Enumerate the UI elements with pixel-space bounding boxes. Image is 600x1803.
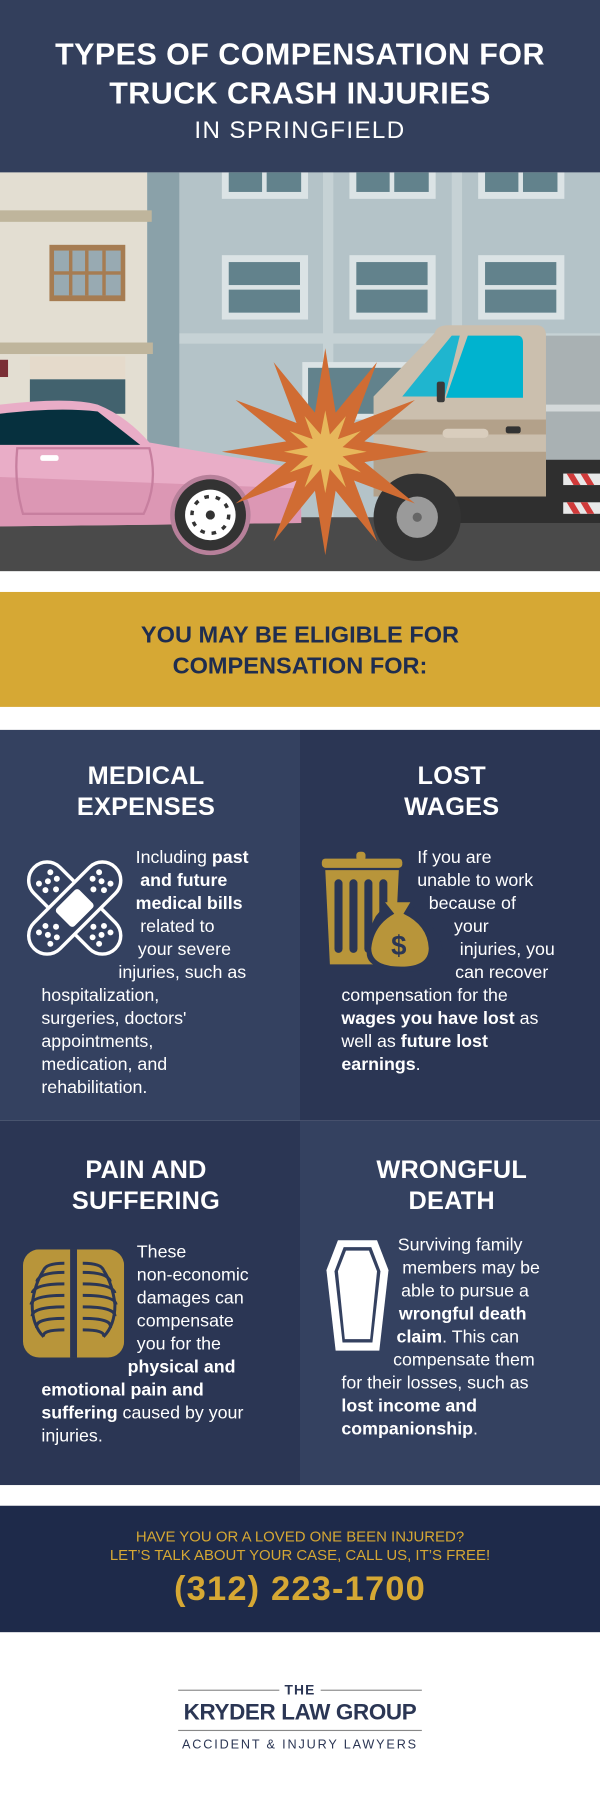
text: pain and suffering: injuries. (41, 1426, 103, 1446)
title: TRUCK CRASH INJURIES (109, 76, 491, 110)
text: medical expenses (41, 848, 249, 1098)
text: medical expenses: your severe (138, 940, 231, 960)
banner heading: COMPENSATION FOR: (173, 653, 427, 679)
icon: coffin (326, 1240, 389, 1351)
text: wrongful death: claim. This can (397, 1328, 519, 1347)
text: lost wages: wages you have lost as (341, 1009, 538, 1029)
text: wrongful death: for their losses, such as (341, 1374, 529, 1393)
title band (0, 0, 600, 172)
cta text: HAVE YOU OR A LOVED ONE BEEN INJURED? (136, 1528, 464, 1545)
text: lost wages: your (454, 917, 489, 937)
text: medical expenses: injuries, such as (118, 963, 246, 983)
icon: trash can and money bag (322, 852, 429, 967)
heading: lost wages (404, 761, 499, 821)
text: wrongful death: wrongful death (399, 1305, 527, 1324)
banner heading (141, 622, 459, 679)
heading: medical expenses (77, 761, 215, 821)
text: lost wages: unable to work (417, 871, 533, 891)
text: pain and suffering: These (137, 1243, 186, 1262)
text: wrongful death: lost income and (341, 1397, 477, 1416)
panel: pain and suffering (0, 1121, 300, 1485)
text: wrongful death: Surviving family (398, 1236, 522, 1255)
heading: lost wages: LOST (418, 761, 486, 790)
phone number: (312) 223-1700 (174, 1570, 426, 1608)
text: lost wages: earnings. (341, 1055, 421, 1075)
icon: bandages (27, 860, 122, 956)
text: lost wages (341, 848, 555, 1075)
text: pain and suffering: compensate (137, 1311, 234, 1331)
text: lost wages: can recover (455, 963, 548, 983)
gold banner (0, 592, 600, 707)
logo: KRYDER LAW GROUP (184, 1700, 416, 1725)
text: wrongful death: able to pursue a (401, 1282, 529, 1301)
text: medical expenses: and future (140, 871, 227, 891)
panel: medical expenses (0, 730, 300, 1121)
explosion (222, 348, 429, 555)
text: pain and suffering: you for the (137, 1334, 221, 1354)
text: lost wages: injuries, you (460, 940, 555, 960)
panel: wrongful death (300, 1121, 600, 1485)
text: pain and suffering: damages can (137, 1289, 244, 1308)
heading: lost wages: WAGES (404, 792, 499, 821)
pink car (0, 401, 301, 526)
text: wrongful death: members may be (402, 1259, 540, 1278)
text: medical expenses: rehabilitation. (41, 1078, 147, 1098)
heading: wrongful death (376, 1155, 527, 1215)
cta text (110, 1528, 490, 1563)
text: pain and suffering: physical and (128, 1357, 236, 1377)
text: pain and suffering (41, 1243, 249, 1446)
text: medical expenses: medical bills (136, 894, 243, 914)
heading: medical expenses: MEDICAL (88, 761, 204, 790)
text: medical expenses: hospitalization, (41, 986, 159, 1006)
banner heading: YOU MAY BE ELIGIBLE FOR (141, 622, 459, 648)
text: medical expenses: surgeries, doctors' (41, 1009, 186, 1029)
heading: wrongful death: WRONGFUL (376, 1155, 527, 1184)
text: lost wages: compensation for the (341, 986, 508, 1006)
cta text: LET’S TALK ABOUT YOUR CASE, CALL US, IT’S FREE! (110, 1546, 490, 1563)
title (55, 37, 545, 110)
text: pain and suffering: suffering caused by your (41, 1403, 243, 1423)
title: TYPES OF COMPENSATION FOR (55, 37, 545, 71)
text: lost wages: because of (429, 894, 516, 914)
text: medical expenses: related to (140, 917, 215, 937)
logo: ACCIDENT & INJURY LAWYERS (182, 1738, 418, 1752)
icon: lungs x-ray (23, 1249, 124, 1358)
logo (178, 1682, 422, 1752)
text: wrongful death (341, 1236, 540, 1439)
text: lost wages: If you are (417, 848, 492, 868)
icon: trash can and money bag: $ (391, 930, 407, 961)
call to action band (0, 1506, 600, 1632)
heading: pain and suffering (72, 1155, 220, 1215)
subtitle: IN SPRINGFIELD (194, 117, 406, 144)
text: wrongful death: compensate them (393, 1351, 535, 1370)
illustration: truck crash (0, 172, 600, 572)
text: medical expenses: medication, and (41, 1055, 167, 1075)
text: pain and suffering: emotional pain and (41, 1380, 204, 1400)
text: pain and suffering: non-economic (137, 1266, 249, 1285)
logo: THE (284, 1682, 316, 1698)
text: lost wages: well as future lost (341, 1032, 488, 1052)
heading: pain and suffering: PAIN AND (85, 1155, 207, 1184)
heading: pain and suffering: SUFFERING (72, 1186, 220, 1215)
text: medical expenses: Including past (136, 848, 249, 868)
heading: medical expenses: EXPENSES (77, 792, 215, 821)
heading: wrongful death: DEATH (409, 1186, 495, 1215)
truck (540, 336, 600, 474)
text: wrongful death: companionship. (341, 1420, 478, 1439)
text: medical expenses: appointments, (41, 1032, 153, 1052)
panel: lost wages (300, 730, 600, 1121)
